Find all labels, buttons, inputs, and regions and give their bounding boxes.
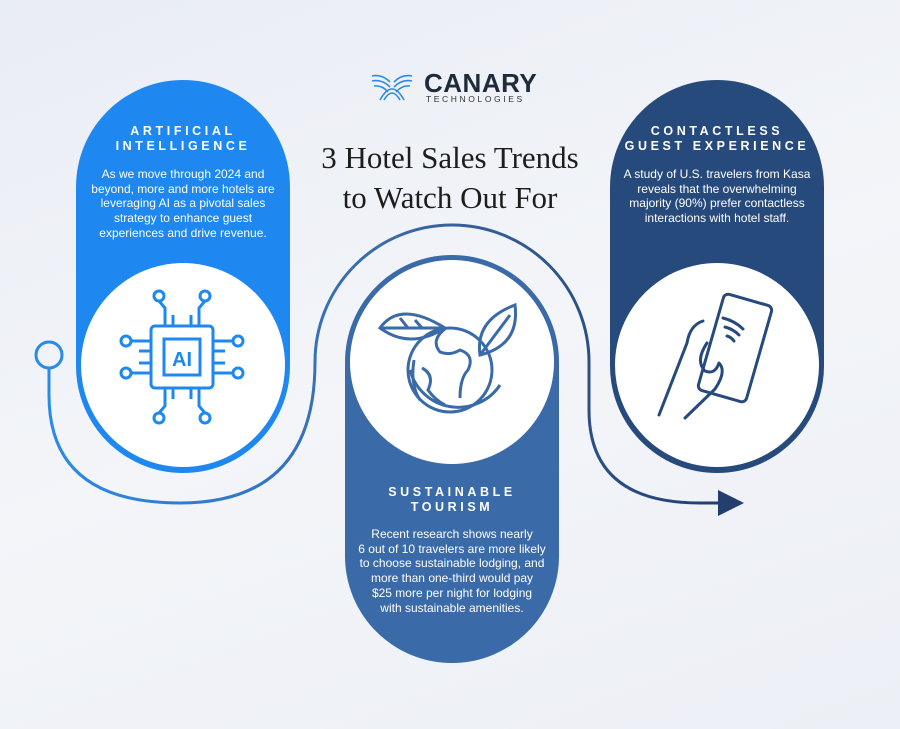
- title: [321, 140, 579, 215]
- text block: Recent research shows nearly: [371, 527, 533, 541]
- logo: CANARY: [424, 68, 537, 98]
- text block: more than one-third would pay: [371, 571, 533, 585]
- text block: [91, 167, 275, 240]
- icon: AI chip: AI: [172, 349, 192, 371]
- text block: A study of U.S. travelers from Kasa: [624, 167, 810, 181]
- icon: AI chip: [81, 263, 285, 467]
- heading: [625, 124, 809, 153]
- text block: [624, 167, 810, 225]
- panel: contactless guest experience: [610, 80, 824, 473]
- heading: CONTACTLESS: [651, 124, 783, 138]
- heading: [388, 485, 516, 514]
- text block: [358, 527, 546, 615]
- text block: leveraging AI as a pivotal sales: [101, 196, 265, 210]
- logo: TECHNOLOGIES: [426, 94, 525, 104]
- icon: canary wings: [372, 74, 412, 100]
- text block: $25 more per night for lodging: [372, 586, 532, 600]
- heading: TOURISM: [411, 500, 493, 514]
- title: 3 Hotel Sales Trends: [321, 140, 579, 175]
- panel: sustainable tourism: [345, 255, 559, 663]
- text block: experiences and drive revenue.: [99, 226, 267, 240]
- text block: with sustainable amenities.: [380, 601, 524, 615]
- text block: interactions with hotel staff.: [645, 211, 789, 225]
- title: to Watch Out For: [343, 180, 557, 215]
- logo: [372, 68, 537, 104]
- heading: SUSTAINABLE: [388, 485, 516, 499]
- text block: strategy to enhance guest: [114, 211, 252, 225]
- text block: As we move through 2024 and: [102, 167, 264, 181]
- heading: INTELLIGENCE: [116, 139, 250, 153]
- text block: beyond, more and more hotels are: [91, 182, 275, 196]
- heading: [116, 124, 250, 153]
- text block: reveals that the overwhelming: [637, 182, 797, 196]
- heading: GUEST EXPERIENCE: [625, 139, 809, 153]
- text block: to choose sustainable lodging, and: [360, 556, 544, 570]
- text block: 6 out of 10 travelers are more likely: [358, 542, 546, 556]
- text block: majority (90%) prefer contactless: [629, 196, 805, 210]
- heading: ARTIFICIAL: [130, 124, 236, 138]
- panel: artificial intelligence: [76, 80, 290, 473]
- icon: hand with phone: [615, 263, 819, 467]
- icon: globe with leaves: [350, 260, 554, 464]
